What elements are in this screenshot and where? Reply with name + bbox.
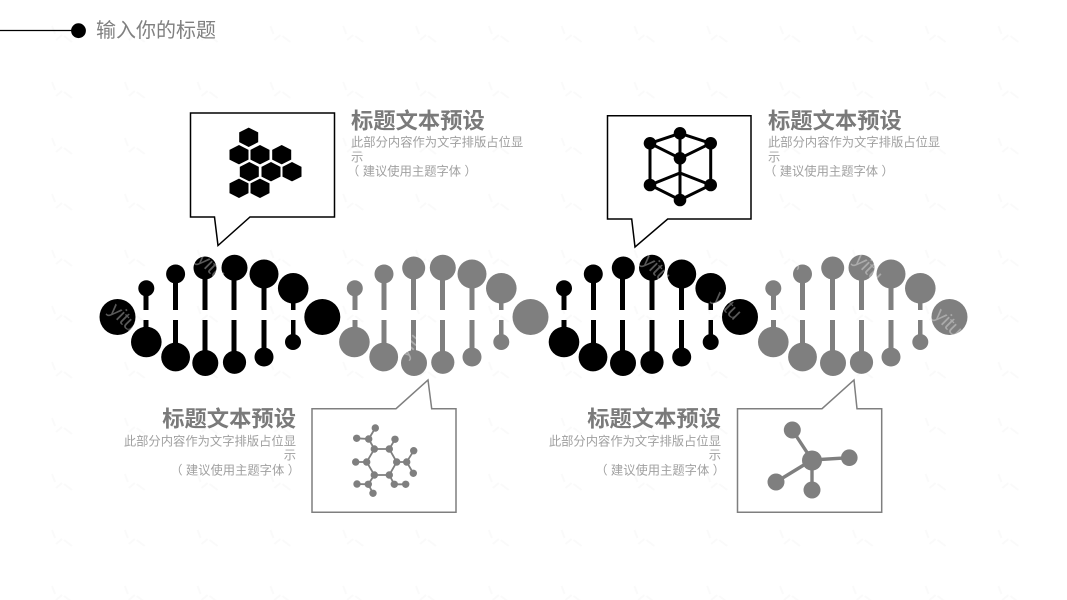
text block: bottom right: （ 建议使用主题字体 ） — [595, 462, 725, 478]
text block: top right: 此部分内容作为文字排版占位显 — [768, 134, 940, 150]
text block: top right: 示 — [768, 150, 780, 164]
text block: top right — [764, 108, 940, 178]
text block: bottom right: 此部分内容作为文字排版占位显 — [549, 434, 721, 448]
watermarks over helix: yitu — [781, 233, 818, 271]
title bar: 输入你的标题 — [96, 19, 216, 42]
text block: bottom left: 标题文本预设 — [162, 406, 296, 432]
watermarks over helix: yitu — [637, 250, 675, 288]
icon: ring molecule — [352, 424, 417, 497]
watermarks over helix: yitu — [849, 249, 887, 287]
text block: bottom right — [549, 406, 725, 478]
text block: bottom left: 此部分内容作为文字排版占位显 — [124, 434, 296, 448]
DNA helix: second gray segment — [758, 255, 968, 376]
title bar — [0, 19, 216, 42]
watermarks over helix: yitu — [708, 287, 746, 325]
icon: molecular cube — [644, 127, 717, 206]
text block: top left — [347, 108, 523, 178]
text block: bottom right: 标题文本预设 — [587, 406, 721, 432]
callout: honeycomb — [190, 113, 334, 246]
watermarks over helix: yitu — [393, 324, 430, 362]
icon: honeycomb — [229, 127, 302, 199]
text block: bottom right: 示 — [709, 448, 721, 462]
watermarks over helix: yitu — [104, 299, 142, 337]
callout: ring molecule — [312, 380, 456, 512]
callout: cube — [608, 116, 751, 247]
watermarks over helix: yitu — [192, 248, 230, 286]
DNA helix: first black segment — [100, 255, 340, 376]
callout: star molecule — [738, 380, 882, 512]
text block: top left: （ 建议使用主题字体 ） — [347, 164, 477, 178]
text block: top right: 标题文本预设 — [768, 108, 902, 134]
DNA helix: first gray segment — [339, 255, 548, 376]
text block: bottom left: （ 建议使用主题字体 ） — [170, 462, 300, 478]
watermarks over helix: yitu — [929, 304, 967, 342]
text block: top right: （ 建议使用主题字体 ） — [764, 164, 894, 178]
text block: top left: 标题文本预设 — [351, 108, 485, 134]
DNA helix: second black segment — [549, 255, 758, 376]
text block: bottom left: 示 — [284, 448, 296, 462]
icon: star molecule — [768, 422, 858, 498]
text block: top left: 示 — [351, 150, 363, 164]
text block: top left: 此部分内容作为文字排版占位显 — [351, 134, 523, 150]
watermarks over helix — [104, 233, 967, 362]
text block: bottom left — [124, 406, 300, 478]
